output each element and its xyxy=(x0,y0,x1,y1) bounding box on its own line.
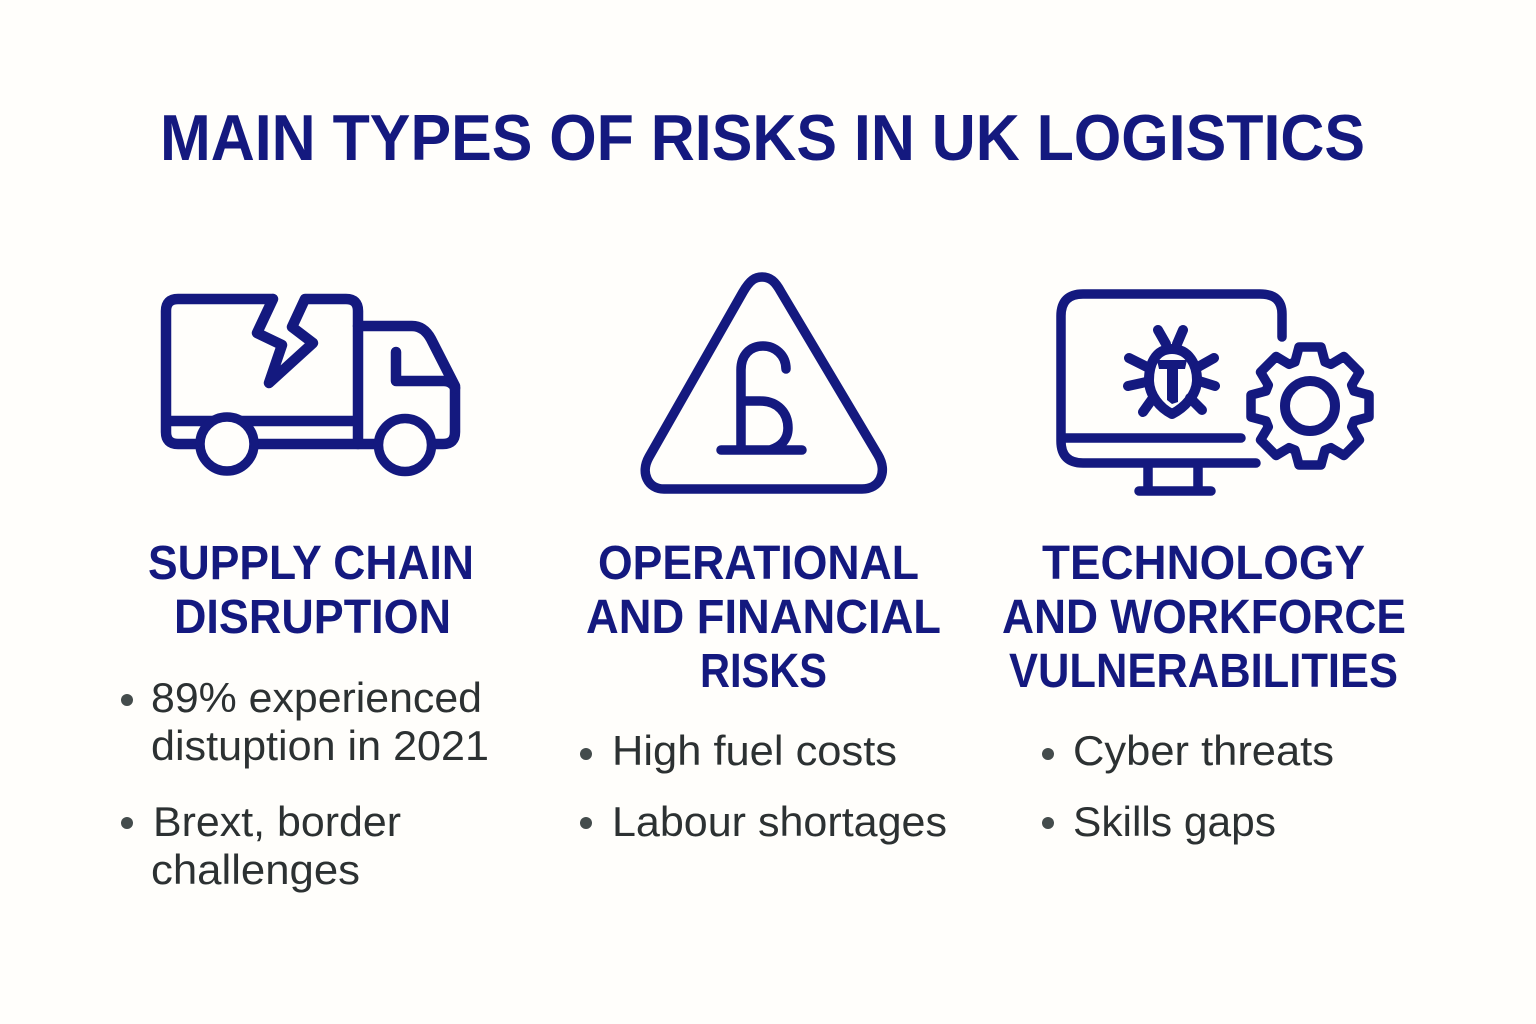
heading: technology and workforce vulnerabilities: VULNERABILITIES xyxy=(1009,645,1398,698)
bullet: Brexit and border challenges xyxy=(121,798,401,893)
heading: technology and workforce vulnerabilities xyxy=(1002,537,1406,698)
bullet: Brexit and border challenges: challenges xyxy=(151,846,360,893)
icon: broken delivery truck xyxy=(166,299,455,472)
panel: supply chain disruption xyxy=(121,299,489,893)
bullet: 89% experienced disruption: 89% experienced xyxy=(151,674,482,721)
panel: operational and financial risks xyxy=(580,277,947,845)
bullet: high fuel costs: High fuel costs xyxy=(612,727,897,774)
icon: warning triangle with pound sign xyxy=(645,277,882,489)
title: MAIN TYPES OF RISKS IN UK LOGISTICS xyxy=(160,101,1365,174)
icon: monitor with bug and gear xyxy=(1061,294,1369,491)
heading: technology and workforce vulnerabilities: TECHNOLOGY xyxy=(1042,537,1365,590)
bullet: Brexit and border challenges: Brext, border xyxy=(153,798,401,845)
heading: supply chain disruption: SUPPLY CHAIN xyxy=(148,537,474,590)
bullet: cyber threats: Cyber threats xyxy=(1073,727,1334,774)
heading: operational and financial risks: OPERATIONAL xyxy=(598,537,919,590)
bullet: labour shortages: Labour shortages xyxy=(612,798,947,845)
heading: operational and financial risks xyxy=(586,537,941,698)
heading: supply chain disruption xyxy=(148,537,474,644)
panel: technology and workforce vulnerabilities xyxy=(1002,294,1406,845)
heading: operational and financial risks: RISKS xyxy=(700,645,827,698)
bullet: skills gaps: Skills gaps xyxy=(1073,798,1276,845)
heading: operational and financial risks: AND FINANCIAL xyxy=(586,591,941,644)
bullet: 89% experienced disruption xyxy=(121,674,489,769)
heading: supply chain disruption: DISRUPTION xyxy=(174,591,451,644)
bullet: 89% experienced disruption: distuption in 2021 xyxy=(151,722,489,769)
heading: technology and workforce vulnerabilities: AND WORKFORCE xyxy=(1002,591,1406,644)
